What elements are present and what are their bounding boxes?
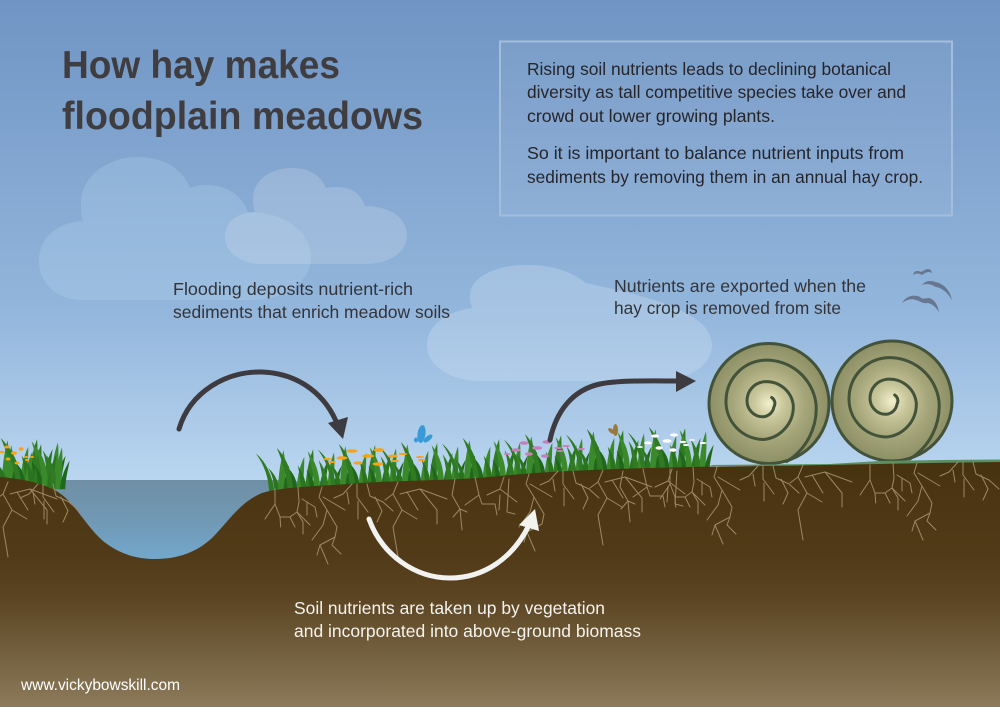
panel: balance explanation: Rising soil nutrients leads to declining botanical [527, 59, 891, 79]
cloud: centre [427, 265, 712, 381]
text: uptake label [294, 598, 641, 641]
text: uptake label: Soil nutrients are taken up by vegetation [294, 598, 605, 618]
text: uptake label: and incorporated into above-ground biomass [294, 621, 641, 641]
icon: blue butterfly [414, 425, 434, 444]
text: export label: hay crop is removed from site [614, 298, 841, 318]
panel: balance explanation: So it is important to balance nutrient inputs from [527, 143, 904, 163]
text: export label: Nutrients are exported when the [614, 276, 866, 296]
text: flooding label: Flooding deposits nutrient-rich [173, 279, 413, 299]
arrow: export [550, 371, 696, 440]
arrow: flooding deposits [179, 372, 348, 439]
short grass strip [708, 460, 1000, 467]
flowers: white [637, 433, 706, 452]
panel: balance explanation: diversity as tall competitive species take over and [527, 82, 906, 102]
hay bales [709, 341, 952, 464]
panel: balance explanation [500, 42, 952, 216]
title: How hay makes [62, 44, 340, 87]
arrow: uptake [369, 509, 539, 578]
sky background [0, 0, 1000, 481]
title: floodplain meadows [62, 95, 423, 138]
title [62, 44, 423, 138]
text: flooding label: sediments that enrich meadow soils [173, 302, 450, 322]
roots [0, 462, 999, 564]
text: flooding label [173, 279, 450, 322]
cloud: upper left large [39, 157, 311, 300]
icon: brown butterfly [607, 424, 618, 436]
grass [0, 427, 714, 494]
soil [0, 462, 1000, 707]
cloud: upper middle [225, 168, 407, 264]
flowers: pink [504, 440, 585, 458]
icon: birds [902, 269, 952, 312]
text: website credit: www.vickybowskill.com [20, 677, 180, 694]
panel: balance explanation: sediments by removing them in an annual hay crop. [527, 167, 923, 187]
flowers: orange left [0, 446, 34, 464]
text: export label [614, 276, 866, 318]
water [40, 480, 280, 565]
flowers: orange meadow [322, 448, 426, 466]
panel: balance explanation: crowd out lower growing plants. [527, 106, 775, 126]
